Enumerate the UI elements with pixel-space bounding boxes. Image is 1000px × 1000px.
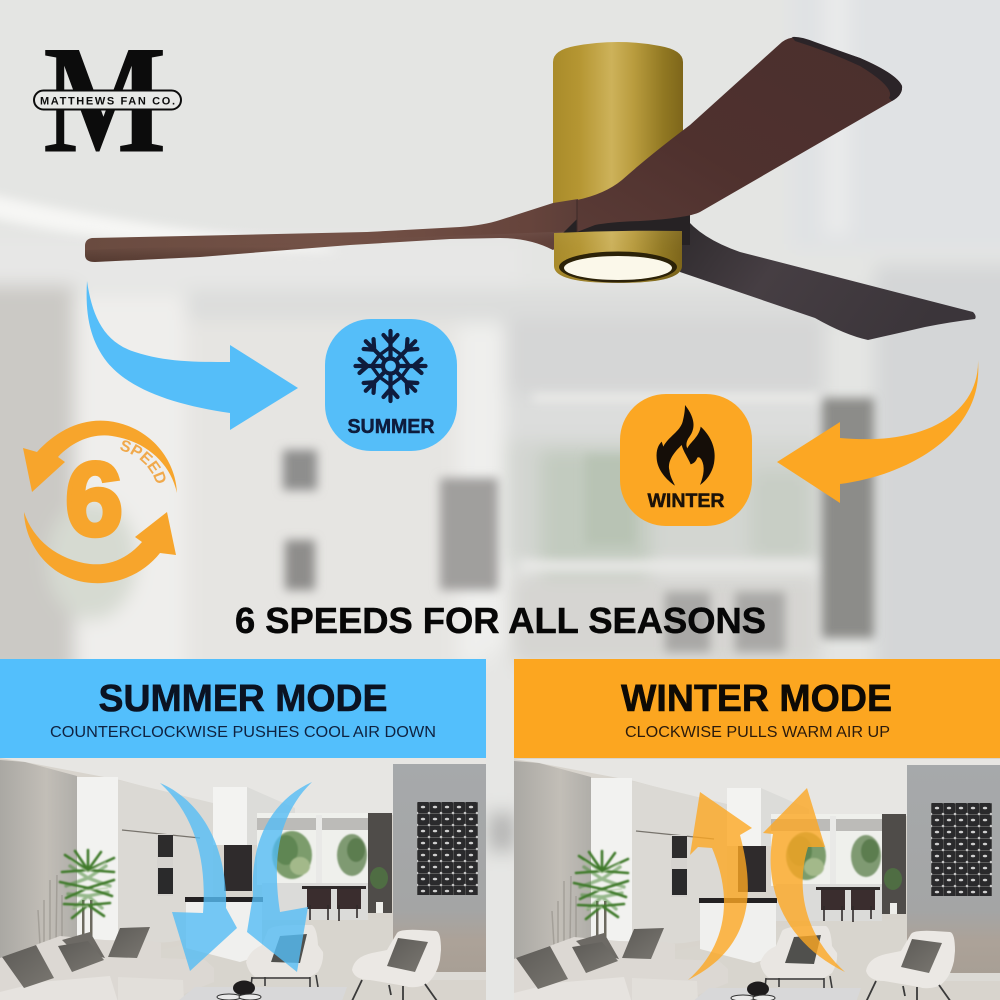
wood joint — [576, 200, 578, 232]
logo name pill — [34, 90, 181, 110]
arrow: orange curved arrow to winter — [777, 360, 978, 503]
curved label SPEED: SPEED — [120, 440, 166, 483]
winter room photo — [514, 757, 1000, 1000]
ceiling fan — [85, 37, 976, 340]
panel: summer mode — [0, 659, 490, 1000]
summer label: SUMMER — [348, 415, 435, 438]
winter mode header: CLOCKWISE PULLS WARM AIR UP — [625, 724, 890, 741]
winter badge background — [620, 394, 752, 526]
arrow: blue curved arrow to summer — [87, 281, 298, 430]
logo monogram letter: M — [43, 14, 167, 186]
top rotating arrow — [23, 421, 177, 493]
winter label: WINTER — [648, 490, 724, 512]
summer mode header — [0, 659, 486, 758]
summer mode header: COUNTERCLOCKWISE PUSHES COOL AIR DOWN — [50, 724, 436, 741]
summer badge — [325, 319, 457, 451]
airflow arrows: cool air down — [160, 782, 312, 972]
winter mode header — [514, 659, 1000, 758]
lower brass ring — [554, 231, 682, 283]
panel: winter mode — [514, 659, 1000, 1000]
fan canopy — [553, 42, 683, 232]
winter badge — [620, 394, 752, 526]
big number 6: 6 — [65, 442, 123, 558]
icon: snowflake — [356, 331, 426, 401]
left blade — [85, 199, 578, 262]
6 speed icon — [23, 420, 177, 584]
summer room photo — [0, 756, 490, 1000]
heading: 6 SPEEDS FOR ALL SEASONS — [235, 600, 766, 641]
logo: Matthews Fan Co. — [34, 14, 181, 186]
summer badge background — [325, 319, 457, 451]
winter mode header: WINTER MODE — [621, 678, 892, 720]
lower blade — [680, 216, 976, 340]
upper blade — [577, 38, 902, 232]
fan light — [559, 252, 677, 282]
airflow arrows: warm air up — [688, 788, 845, 980]
summer mode header: SUMMER MODE — [98, 678, 388, 720]
fan hub underside — [560, 208, 690, 245]
bottom rotating arrow — [24, 512, 176, 583]
upper blade dark edge — [792, 37, 902, 101]
logo name pill: MATTHEWS FAN CO. — [40, 96, 175, 108]
icon: flame — [657, 405, 715, 486]
